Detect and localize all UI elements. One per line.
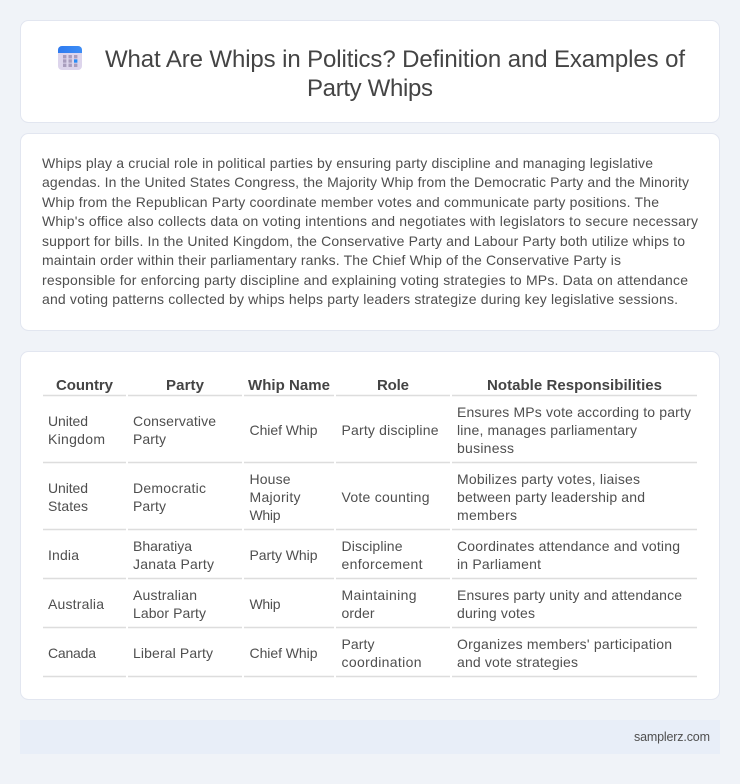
table row: Canada: Liberal Party [133,645,213,661]
text block: whips overview: agendas. In the United States Congress, the Majority Whip from the Democratic Party and the Minority [42,174,689,190]
table row: Canada: coordination [342,654,422,670]
text block: whips overview: Whips play a crucial role in political parties by ensuring party discipline and managing legislative [42,155,653,171]
table row: United Kingdom: Chief Whip [250,422,318,438]
table row: Australia: Labor Party [133,605,206,621]
panel: party whips table [20,352,720,700]
table row: United States: House [250,471,291,487]
table row: Australia [48,587,682,621]
table row: India: enforcement [342,556,423,572]
table row: United Kingdom: Conservative [133,413,216,429]
table header [56,377,662,394]
table row: United States: Party [133,498,166,514]
table row: India: Coordinates attendance and voting [457,538,680,554]
table row: India: Bharatiya [133,538,192,554]
table row: India: Janata Party [133,556,214,572]
table header: Notable Responsibilities [487,377,662,394]
table row: United Kingdom: Party discipline [342,422,439,438]
table row: United States: Democratic [133,480,206,496]
table row: Australia: during votes [457,605,535,621]
table row: Canada: Canada [48,645,96,661]
text block: whips overview: support for bills. In the United Kingdom, the Conservative Party and Labour Party both utilize whips to [42,233,685,249]
table row: Australia: order [342,605,375,621]
table row: Australia: Australia [48,596,104,612]
table row: Canada: Chief Whip [250,645,318,661]
table row: United Kingdom: business [457,440,514,456]
table row: United Kingdom: Party [133,431,166,447]
table row: United States: Majority [250,489,300,505]
table header: Country [56,377,114,394]
panel: title card [20,20,720,122]
table row: United States: Mobilizes party votes, liaises [457,471,640,487]
table row: United States: United [48,480,88,496]
table row: United Kingdom: Ensures MPs vote according to party [457,404,691,420]
table row: India: India [48,547,79,563]
table row: Australia: Ensures party unity and attendance [457,587,682,603]
footer bar: samplerz.com [634,730,710,744]
text block: whips overview: Whip from the Republican Party coordinate member votes and communicate party positions. The [42,194,659,210]
table row: United Kingdom [48,404,691,456]
text block: whips overview: Whip's office also collects data on voting intentions and negotiates with legislators to secure necessary [42,213,698,229]
text block: whips overview: responsible for enforcing party discipline and explaining voting strategies to MPs. Data on attendance [42,272,688,288]
text block: whips overview [42,155,698,307]
table row: India: Discipline [342,538,403,554]
table row: United States: States [48,498,88,514]
table row: India: Party Whip [250,547,318,563]
table row: United States: between party leadership and [457,489,645,505]
text block: whips overview: and voting patterns collected by whips helps party leaders strategize during key legislative sessions. [42,291,678,307]
title: What Are Whips in Politics? Definition and Examples of [105,46,685,73]
footer bar [20,720,720,754]
table row: Australia: Australian [133,587,197,603]
table row: United Kingdom: United [48,413,88,429]
panel: introduction text [20,134,720,330]
table row: Australia: Whip [250,596,281,612]
text block: whips overview: maintain order within their parliamentary ranks. The Chief Whip of the Conservative Party is [42,252,621,268]
table header: Role [377,377,409,394]
table row: Canada: Party [342,636,374,652]
table row: Canada: Organizes members' participation [457,636,672,652]
table row: Canada: and vote strategies [457,654,578,670]
title [105,46,685,102]
table row: United Kingdom: Kingdom [48,431,105,447]
table row: Canada [48,636,672,670]
table row: United Kingdom: line, manages parliamentary [457,422,637,438]
table row: United States [48,471,645,523]
table row: Australia: Maintaining [342,587,416,603]
table row: India: in Parliament [457,556,541,572]
table row: India [48,538,680,572]
table row: United States: Whip [250,507,281,523]
table header: Party [166,377,205,394]
table header: Whip Name [248,377,330,394]
title: Party Whips [307,75,433,102]
table row: United States: Vote counting [342,489,430,505]
icon: calendar [58,46,82,70]
table row: United States: members [457,507,517,523]
